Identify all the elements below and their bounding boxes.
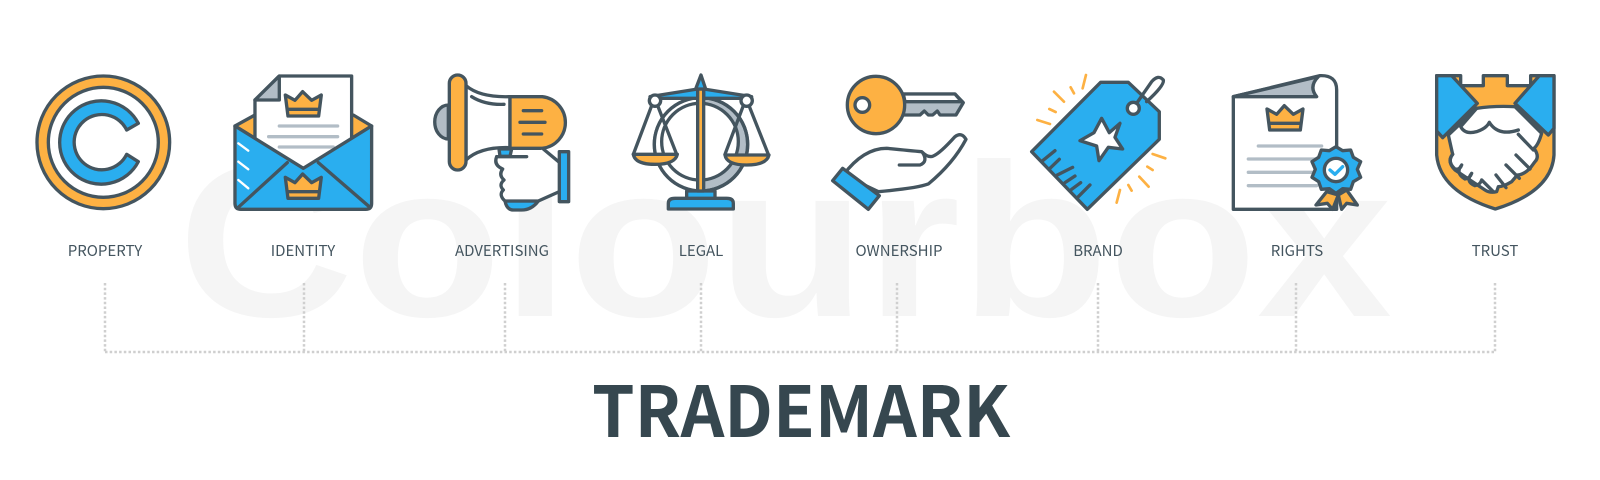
labels: BRAND — [1073, 240, 1123, 261]
labels: TRUST — [1472, 240, 1518, 261]
icon: price tag — [1032, 75, 1165, 209]
watermark: Colourbox — [178, 120, 1392, 363]
labels: ADVERTISING — [455, 240, 549, 261]
dotted connector — [105, 283, 1495, 352]
icon: shield handshake — [1437, 76, 1554, 209]
labels: PROPERTY — [68, 240, 142, 261]
icon: envelope with crown — [235, 76, 372, 209]
labels: OWNERSHIP — [856, 240, 942, 261]
icon: key over hand — [833, 76, 966, 209]
labels: LEGAL — [679, 240, 723, 261]
icon: megaphone — [435, 75, 569, 210]
icon: certificate — [1233, 76, 1361, 209]
icon: scales — [633, 75, 769, 209]
icon: copyright — [37, 76, 170, 209]
labels: RIGHTS — [1271, 240, 1323, 261]
title: TRADEMARK — [592, 357, 1011, 458]
labels: IDENTITY — [271, 240, 335, 261]
labels — [68, 240, 1518, 261]
